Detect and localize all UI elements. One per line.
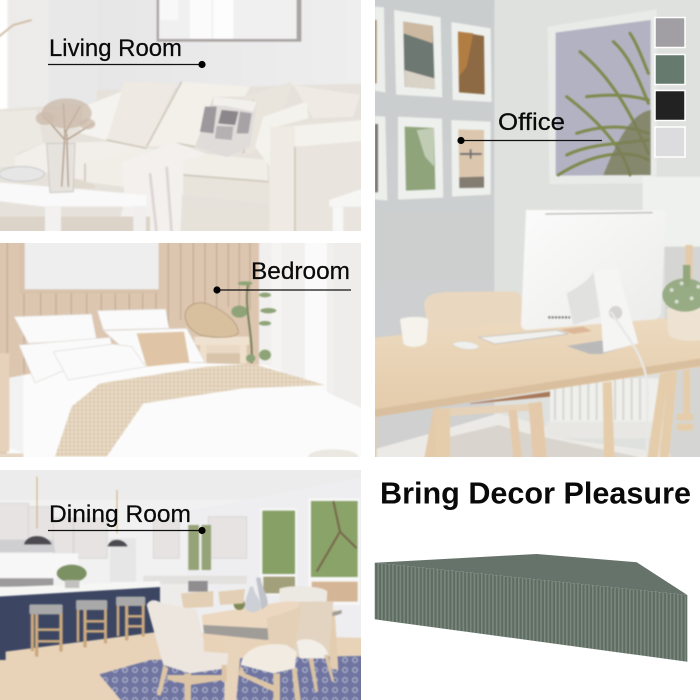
stove: [0, 578, 53, 587]
sink window: [188, 525, 211, 570]
side table with hat: [185, 303, 249, 363]
framed picture: [24, 243, 160, 293]
mug: [400, 317, 428, 347]
chair legs: [423, 402, 547, 463]
coffee table: [0, 180, 146, 231]
bed and duvet: [0, 353, 361, 457]
tan cushion: [137, 332, 189, 367]
kitchen island: [0, 581, 160, 660]
upper cabinets: [0, 503, 247, 558]
chair: [424, 291, 550, 417]
large framed plant picture: [548, 9, 657, 184]
mouse: [452, 341, 479, 349]
colour swatches: [655, 18, 685, 157]
vases: [234, 578, 268, 612]
pantry door: [110, 538, 136, 582]
curtain: [258, 243, 361, 408]
throw blanket: [121, 142, 204, 231]
wood slats: [7, 230, 250, 373]
glass bowl: [0, 167, 44, 181]
range hood: [0, 540, 55, 552]
pillows: [14, 309, 205, 383]
panel: office photo: [360, 0, 700, 470]
lamp shade: [643, 177, 700, 247]
label: Living Room: Living Room: [49, 35, 182, 62]
pendant lamps: [24, 477, 128, 546]
keyboard: [478, 330, 568, 344]
product: corner shelf: [375, 554, 687, 662]
plant on island: [57, 565, 87, 588]
panel: living room photo: [0, 0, 373, 243]
radiator: [550, 378, 658, 422]
dried sprig: [0, 20, 32, 38]
panel: bedroom photo: [0, 243, 361, 457]
potted plant: [662, 265, 700, 341]
front chair, wood back: [238, 607, 303, 700]
potted plant: [231, 281, 276, 363]
checked cushion: [195, 97, 257, 157]
desk top: [360, 318, 700, 419]
dining table: [202, 600, 342, 700]
desk legs: [372, 370, 693, 463]
skirting and floor: [360, 413, 670, 470]
sofa: [0, 81, 361, 231]
floor: [0, 632, 373, 700]
monitor: [521, 210, 666, 330]
bench: [308, 449, 358, 457]
panel: dining room photo: [0, 455, 373, 700]
monitor stand front: [567, 268, 648, 463]
label: Bedroom: [213, 258, 351, 294]
rug: [99, 656, 373, 700]
backsplash and counter: [52, 553, 78, 560]
front chair, upholstered: [147, 600, 228, 700]
back chairs: [181, 586, 334, 692]
heading: Bring Decor Pleasure: [380, 476, 691, 510]
rug and floor: [0, 216, 150, 231]
phone: [560, 327, 592, 334]
label: Dining Room: Dining Room: [49, 501, 191, 528]
label: Office: Office: [498, 109, 565, 136]
label: Office: [457, 109, 602, 144]
framed art grid: [375, 7, 492, 201]
label: Bedroom: Bedroom: [251, 258, 350, 285]
lamp stem: [685, 245, 693, 285]
bar stools: [29, 597, 145, 657]
large windows: [260, 498, 360, 605]
wall mirror frame: [157, 0, 301, 42]
knitted throw: [55, 364, 325, 457]
dried flowers vase: [36, 98, 95, 193]
right side table: [329, 189, 361, 231]
